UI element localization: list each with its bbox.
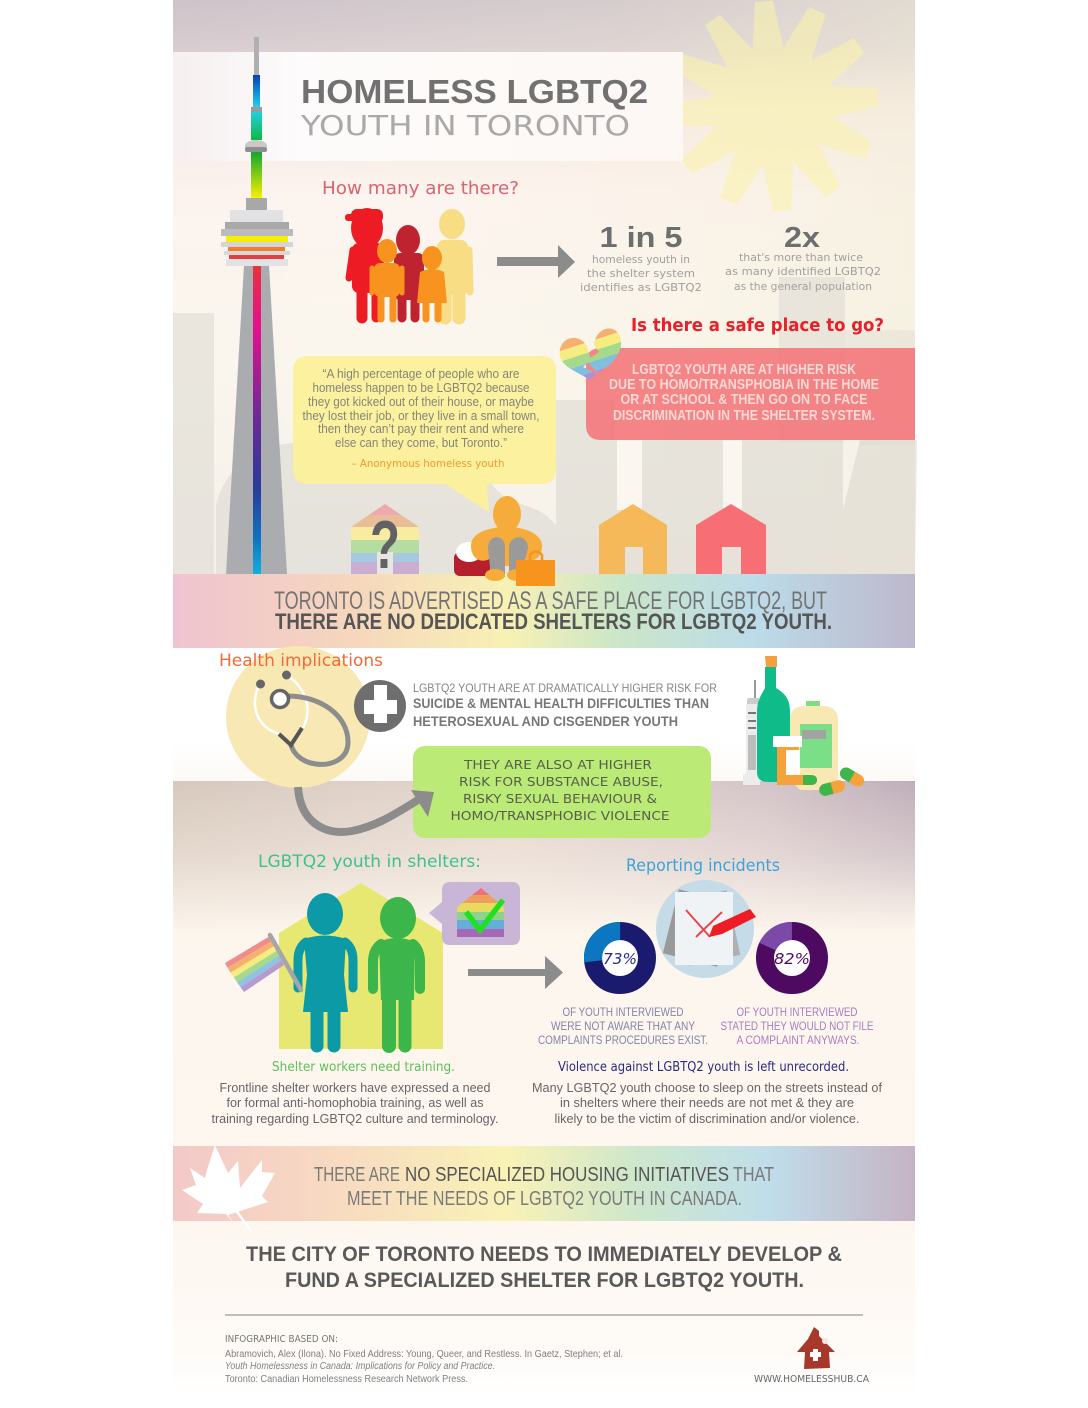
caption: would not file: A COMPLAINT ANYWAYS. (736, 1033, 860, 1047)
icon: shelter house (279, 883, 443, 1049)
panel: higher risk: DISCRIMINATION IN THE SHELTER SYSTEM. (613, 408, 875, 424)
icon: rainbow house with question mark: ? (370, 507, 400, 583)
caption: would not file: STATED THEY WOULD NOT FILE (720, 1019, 874, 1033)
banner: no housing initiatives: NO SPECIALIZED HOUSING INITIATIVES (405, 1164, 729, 1186)
icon: family of figures (345, 208, 470, 319)
logo: homeless hub: WWW.HOMELESSHUB.CA (754, 1374, 869, 1385)
title: HOMELESS LGBTQ2 (301, 73, 648, 110)
heading: health implications: Health implications (219, 651, 383, 671)
stat: 2x: that's more than twice (739, 251, 863, 264)
stat: 1 in 5: homeless youth in (592, 253, 690, 266)
quote bubble: “A high percentage of people who are (322, 367, 520, 381)
text: shelter workers need training (212, 1060, 498, 1126)
text: higher risk of suicide: LGBTQ2 YOUTH ARE AT DRAMATICALLY HIGHER RISK FOR (413, 681, 717, 695)
text: violence left unrecorded (532, 1060, 882, 1126)
title (300, 73, 648, 142)
panel: substance abuse: THEY ARE ALSO AT HIGHER (463, 758, 652, 772)
panel: substance abuse: RISKY SEXUAL BEHAVIOUR & (463, 792, 657, 806)
arrow: family to statistics (497, 245, 575, 278)
text: violence left unrecorded: Many LGBTQ2 youth choose to sleep on the streets instead of (532, 1080, 882, 1095)
caption: complaint awareness (538, 1005, 708, 1047)
text: violence left unrecorded: in shelters where their needs are not met & they are (560, 1095, 854, 1110)
banner: no housing initiatives: MEET THE NEEDS OF LGBTQ2 YOUTH IN CANADA. (347, 1188, 742, 1210)
call to action: THE CITY OF TORONTO NEEDS TO IMMEDIATELY DEVELOP & (246, 1243, 842, 1266)
text: higher risk of suicide: HETEROSEXUAL AND CISGENDER YOUTH (413, 713, 678, 729)
icon: rainbow flag (225, 935, 301, 992)
banner: no dedicated shelters (173, 574, 915, 648)
icon: medical cross (354, 680, 406, 732)
text: shelter workers need training: for formal anti-homophobia training, as well as (226, 1095, 484, 1110)
skyline silhouette (173, 277, 917, 574)
source credits: Toronto: Canadian Homelessness Research Network Press. (225, 1374, 468, 1385)
panel: substance abuse: RISK FOR SUBSTANCE ABUSE, (459, 775, 663, 789)
text: violence left unrecorded: Violence against LGBTQ2 youth is left unrecorded. (558, 1060, 849, 1075)
heading: youth in shelters: LGBTQ2 youth in shelters: (258, 852, 481, 872)
quote bubble (293, 356, 556, 512)
text: violence left unrecorded: likely to be the victim of discrimination and/or violence. (554, 1111, 860, 1126)
quote bubble: else can they come, but Toronto.” (335, 436, 507, 450)
call to action (246, 1243, 842, 1292)
stat: 1 in 5: 1 in 5 (600, 222, 682, 254)
title panel (173, 52, 683, 161)
banner: no housing initiatives (173, 1146, 915, 1221)
banner: no dedicated shelters: THERE ARE NO DEDICATED SHELTERS FOR LGBTQ2 YOUTH. (275, 609, 832, 634)
banner: no dedicated shelters: TORONTO IS ADVERTISED AS A SAFE PLACE FOR LGBTQ2, BUT (274, 587, 827, 615)
banner: no housing initiatives: THERE ARE (314, 1164, 400, 1186)
caption: complaint awareness: COMPLAINTS PROCEDURES EXIST. (538, 1033, 708, 1047)
source credits: Youth Homelessness in Canada: Implications for Policy and Practice. (225, 1361, 495, 1372)
call to action: FUND A SPECIALIZED SHELTER FOR LGBTQ2 YOUTH. (285, 1269, 804, 1292)
donut chart: 82% (756, 922, 828, 994)
speech bubble: approved shelter (429, 882, 520, 945)
text: higher risk of suicide (413, 681, 717, 729)
stat: 2x (725, 222, 881, 293)
heading: how many: How many are there? (322, 178, 519, 199)
icon: complaint form (656, 880, 756, 978)
logo: homeless hub (754, 1327, 869, 1385)
icon: sitting person with luggage (454, 496, 555, 586)
text: higher risk of suicide: SUICIDE & MENTAL HEALTH DIFFICULTIES THAN (413, 695, 709, 711)
arrow: shelter to reporting (468, 956, 563, 989)
stat: 2x: as many identified LGBTQ2 (725, 265, 881, 278)
icon: medicine bottles and syringe (743, 656, 866, 797)
source credits (225, 1334, 623, 1385)
caption: complaint awareness: WERE NOT AWARE THAT ANY (551, 1019, 695, 1033)
stat: 2x: as the general population (734, 280, 872, 293)
heading: reporting incidents: Reporting incidents (626, 856, 780, 876)
caption: would not file (720, 1005, 874, 1047)
background panel (173, 0, 915, 1393)
quote bubble: then they can’t pay their rent and where (318, 422, 524, 436)
text: shelter workers need training: training regarding LGBTQ2 culture and terminology. (212, 1111, 498, 1126)
quote bubble: homeless happen to be LGBTQ2 because (312, 381, 530, 395)
CN tower in rainbow (221, 37, 293, 574)
panel: higher risk: DUE TO HOMO/TRANSPHOBIA IN THE HOME (609, 377, 879, 393)
heading: safe place: Is there a safe place to go? (631, 315, 884, 336)
panel: higher risk (586, 348, 915, 440)
stat: 1 in 5: identifies as LGBTQ2 (580, 281, 702, 294)
title: YOUTH IN TORONTO (300, 109, 630, 142)
curved arrow (298, 787, 434, 832)
caption: complaint awareness: OF YOUTH INTERVIEWED (562, 1005, 684, 1019)
stat: 1 in 5 (580, 222, 702, 294)
source credits: INFOGRAPHIC BASED ON: (225, 1334, 338, 1345)
donut chart: 73% (590, 928, 650, 988)
donut chart: 73%: 73% (603, 950, 637, 968)
icon: red house (696, 504, 766, 574)
icon: orange house (599, 504, 667, 574)
banner: no housing initiatives: THAT (733, 1164, 774, 1186)
icon: sun (667, 0, 879, 212)
icon: maple leaf (182, 1145, 275, 1231)
quote bubble: they got kicked out of their house, or maybe (308, 395, 534, 409)
stat: 2x: 2x (784, 222, 820, 254)
icon: teal woman (298, 893, 353, 1046)
stat: 1 in 5: the shelter system (587, 267, 695, 280)
icon: stethoscope on circle (226, 646, 370, 788)
panel: higher risk: LGBTQ2 YOUTH ARE AT HIGHER RISK (632, 362, 856, 378)
panel: higher risk: OR AT SCHOOL & THEN GO ON TO FACE (620, 392, 868, 408)
caption: would not file: OF YOUTH INTERVIEWED (736, 1005, 858, 1019)
icon: rainbow house with question mark (351, 504, 419, 574)
quote bubble: they lost their job, or they live in a small town, (302, 409, 540, 423)
quote bubble: – Anonymous homeless youth (352, 457, 505, 470)
text: shelter workers need training: Frontline shelter workers have expressed a need (220, 1080, 490, 1095)
icon: broken rainbow heart (560, 328, 621, 380)
icon: green man (373, 897, 420, 1046)
donut chart: 82%: 82% (774, 950, 810, 968)
panel: substance abuse: HOMO/TRANSPHOBIC VIOLENCE (450, 809, 670, 823)
text: shelter workers need training: Shelter workers need training. (272, 1060, 455, 1075)
panel: substance abuse (413, 746, 711, 838)
source credits: Abramovich, Alex (Ilona). No Fixed Address: Young, Queer, and Restless. In Gaetz, Stephen; et al. (225, 1349, 623, 1360)
